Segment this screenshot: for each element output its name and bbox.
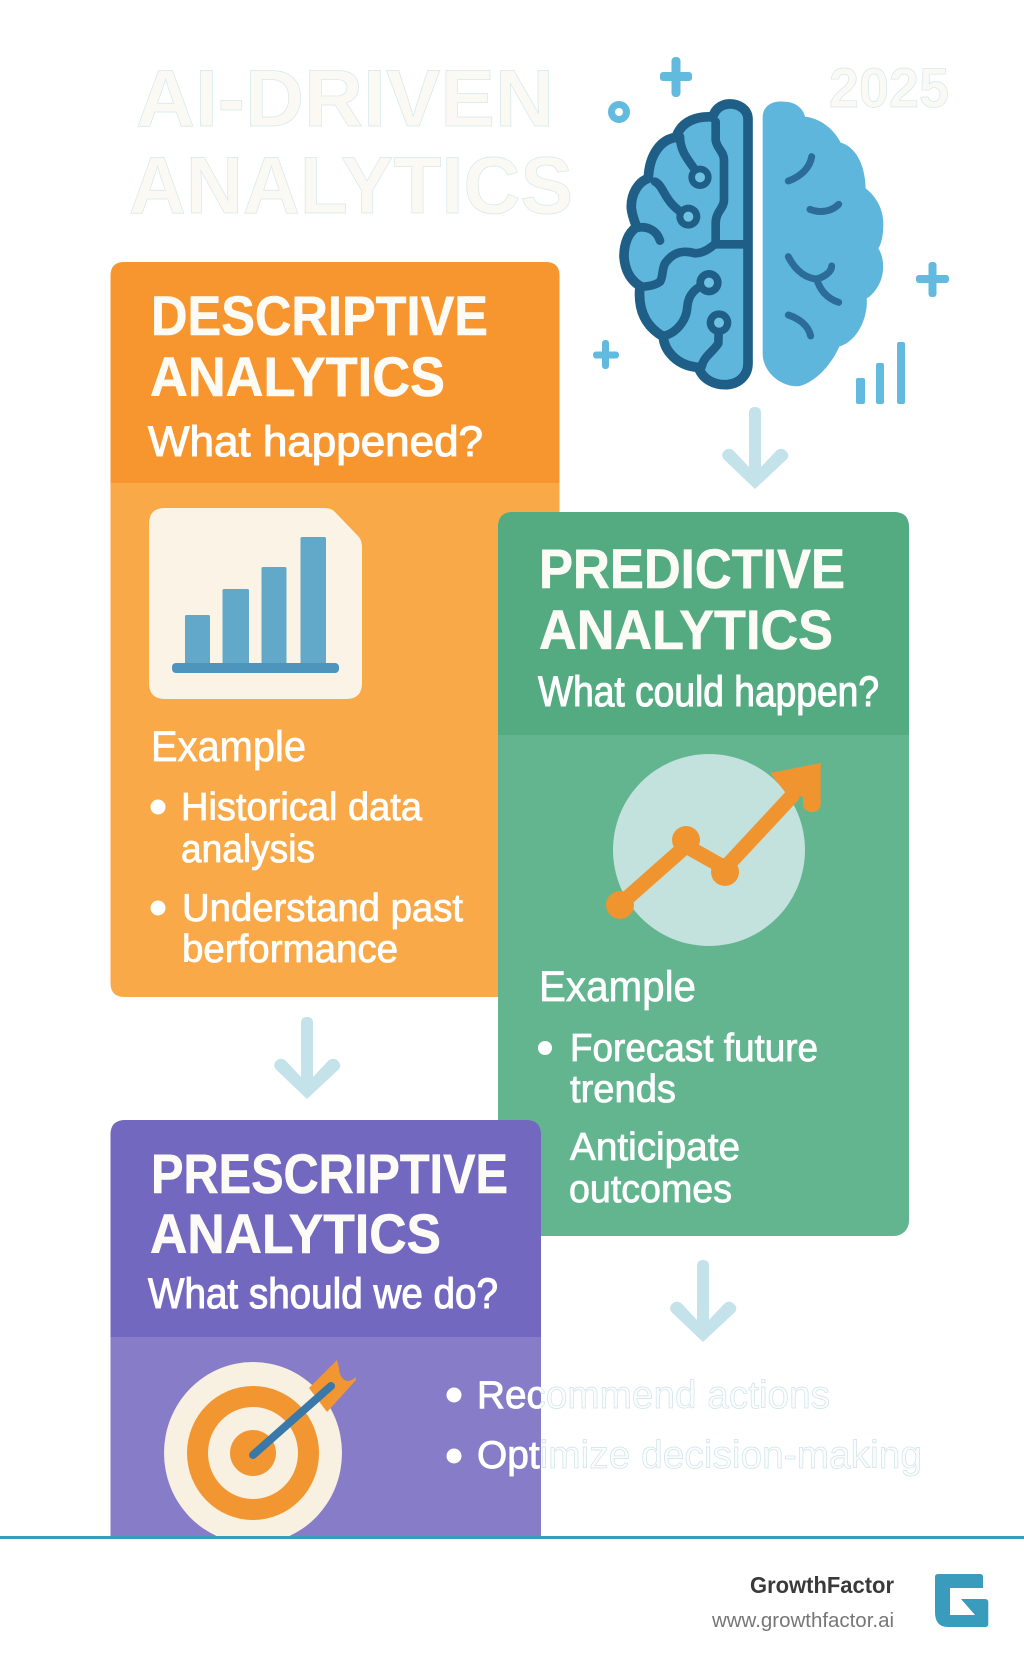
bullet list: trends [570, 1068, 676, 1111]
bullet list: prescriptive actions: Optimize decision-making [477, 1434, 922, 1477]
example label: Example [539, 963, 696, 1011]
arrow: predictive to outcome [670, 1260, 736, 1342]
icon: brain [624, 102, 883, 386]
panel: descriptive analytics [110, 262, 560, 997]
icon: bar chart card [149, 508, 362, 699]
example label: Example [151, 723, 306, 771]
title: AI-DRIVEN [136, 54, 554, 144]
year label: 2025 [829, 56, 949, 119]
bullet list: prescriptive actions: Recommend actions [477, 1374, 830, 1417]
bullet list: berformance [182, 928, 398, 971]
title [129, 54, 573, 231]
panel: prescriptive analytics [110, 1120, 541, 1544]
heading: prescriptive: PRESCRIPTIVE [151, 1143, 508, 1205]
bullet list: Understand past [182, 887, 463, 930]
bullet list: analysis [181, 828, 315, 871]
icon: decorative plus and dot marks [593, 57, 949, 369]
footer: brand text: GrowthFactor [750, 1572, 894, 1598]
bullet list: prescriptive actions [446, 1374, 922, 1477]
bullet list: Historical data [181, 786, 422, 829]
arrow: brain to predictive [722, 407, 788, 489]
heading: predictive [539, 538, 845, 661]
heading: descriptive: DESCRIPTIVE [151, 285, 488, 347]
bullet list: Forecast future [570, 1027, 818, 1070]
bullet list: Anticipate [570, 1126, 740, 1169]
heading: prescriptive: ANALYTICS [150, 1203, 441, 1265]
icon: GrowthFactor logo [935, 1574, 988, 1627]
bullet list: prescriptive actions: Optimize decision-making [477, 1434, 922, 1477]
subheading: What should we do? [148, 1270, 498, 1318]
title: ANALYTICS [129, 141, 573, 231]
footer: brand text: www.growthfactor.ai [711, 1610, 894, 1632]
heading: descriptive [150, 285, 488, 408]
icon: target with arrow [164, 1360, 356, 1544]
footer: brand text [711, 1572, 894, 1632]
heading: predictive: PREDICTIVE [539, 538, 845, 600]
bullet list [538, 1027, 818, 1211]
heading: descriptive: ANALYTICS [150, 346, 445, 408]
icon: trend line in circle [606, 754, 821, 946]
heading: predictive: ANALYTICS [539, 599, 833, 661]
icon: small signal bars [856, 342, 905, 404]
bullet list: prescriptive actions: Recommend actions [477, 1374, 830, 1417]
subheading: What could happen? [538, 668, 879, 716]
arrow: descriptive to prescriptive [274, 1017, 340, 1099]
panel: predictive analytics [498, 512, 909, 1236]
heading: prescriptive [150, 1143, 508, 1265]
bullet list [150, 786, 463, 971]
bullet list: outcomes [569, 1168, 732, 1211]
subheading: What happened? [148, 418, 483, 466]
